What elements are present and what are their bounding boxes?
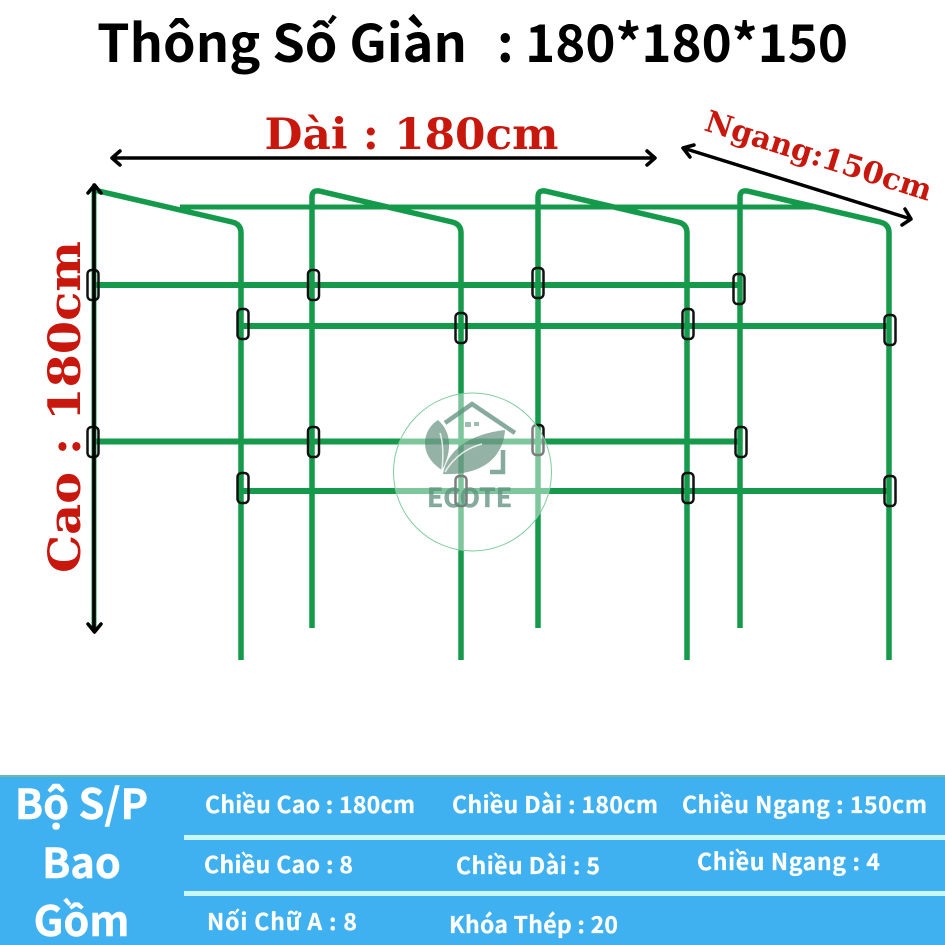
spec row 1: Chiều Dài : 180cm bbox=[452, 786, 658, 820]
arrow: length bbox=[112, 151, 655, 165]
title: : 180*180*150 bbox=[497, 2, 848, 77]
frame arch 1 bbox=[94, 190, 241, 660]
spec row 2: Chiều Cao : 8 bbox=[204, 846, 353, 880]
label: height: Cao : 180cm bbox=[40, 241, 91, 573]
watermark circle bbox=[394, 393, 552, 551]
leaf veins bbox=[440, 433, 482, 472]
leaf left bbox=[425, 420, 449, 470]
label: length: Dài : 180cm bbox=[264, 110, 558, 160]
spec row 2: Chiều Dài : 5 bbox=[456, 847, 600, 881]
top horizontal bar bbox=[180, 204, 815, 210]
house windows bbox=[465, 422, 479, 427]
spec row 1: Chiều Cao : 180cm bbox=[205, 786, 415, 820]
panel top edge bbox=[0, 775, 945, 777]
spec row 3 bbox=[207, 903, 618, 940]
divider 1 bbox=[184, 835, 945, 840]
spec row 2 bbox=[204, 843, 880, 881]
rail 1 bbox=[94, 282, 740, 288]
frame arch 2 bbox=[312, 191, 461, 660]
divider 2 bbox=[184, 891, 945, 896]
panel background bbox=[0, 776, 945, 945]
watermark logo bbox=[394, 393, 552, 551]
title: Thông Số Giàn bbox=[97, 2, 467, 77]
spec row 1: Chiều Ngang : 150cm bbox=[682, 786, 927, 820]
spec row 1 bbox=[205, 786, 927, 820]
ECOTE wordmark: ECOTE bbox=[427, 478, 512, 515]
left post bbox=[92, 190, 96, 630]
steel clips bbox=[88, 268, 896, 506]
rail 3 bbox=[94, 438, 741, 444]
rail 4 bbox=[241, 488, 889, 494]
rail 2 bbox=[241, 323, 889, 329]
panel: product set bbox=[0, 771, 945, 945]
spec row 2: Chiều Ngang : 4 bbox=[697, 843, 880, 877]
house outline bbox=[445, 404, 515, 472]
trellis frame diagram bbox=[94, 190, 889, 660]
spec row 3: Khóa Thép : 20 bbox=[449, 906, 618, 940]
heading: product set includes bbox=[15, 771, 148, 945]
arrow: height bbox=[88, 185, 101, 632]
heading: product set includes: Bộ S/P bbox=[15, 771, 148, 831]
spec row 3: Nối Chữ A : 8 bbox=[207, 903, 357, 937]
leaf right bbox=[443, 430, 505, 474]
arrow: width bbox=[683, 145, 911, 225]
label: width: Ngang:150cm bbox=[701, 104, 936, 209]
heading: product set includes: Bao bbox=[42, 830, 121, 890]
frame arch 3 bbox=[538, 191, 687, 660]
frame arch 4 bbox=[740, 191, 889, 660]
title bbox=[97, 2, 848, 77]
